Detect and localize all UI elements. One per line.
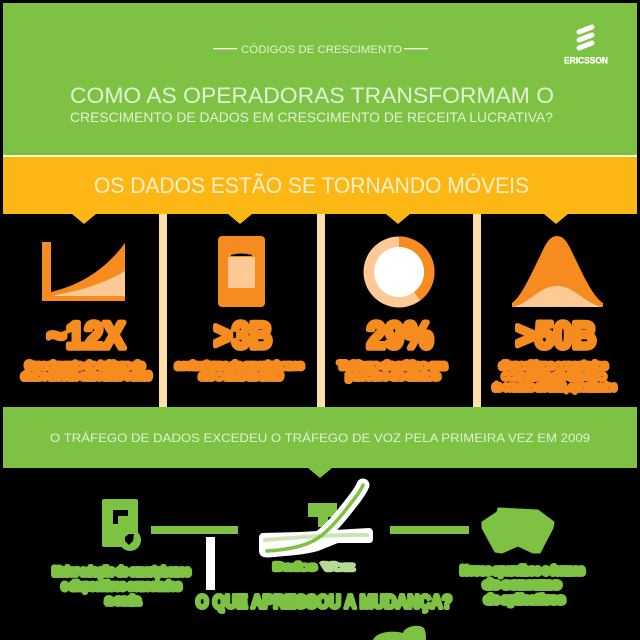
icon: bell curve	[512, 236, 603, 307]
banner heading: OS DADOS ESTÃO SE TORNANDO MÓVEIS	[94, 173, 529, 198]
stat number: ~12X	[47, 315, 125, 356]
stat description: com mais de um tipo	[503, 371, 605, 382]
panel: stat 3B	[176, 236, 303, 382]
icon: partial bottom icon	[373, 626, 426, 640]
chart: data vs voice crossing lines	[259, 485, 373, 573]
description right: Novos aparelhos e formas	[461, 565, 584, 577]
stat description: assinaturas de smartphones	[176, 360, 303, 372]
stat description	[493, 360, 616, 393]
stat number: 29%	[367, 315, 433, 356]
icon: fan of cards	[482, 508, 554, 553]
icon: Ericsson logo: ERICSSON	[564, 56, 608, 66]
description left	[53, 566, 190, 607]
white vertical connector	[206, 537, 215, 590]
chart labels: Dados	[274, 562, 317, 573]
connector line right	[390, 526, 469, 534]
description right: de consumo	[484, 579, 560, 591]
description left: Maior adoção de smartphones	[53, 566, 190, 578]
chart: green T mark	[308, 503, 337, 527]
icon: phone with data	[102, 499, 141, 551]
description left: a cada	[106, 595, 141, 607]
stat description: pacotes de dados	[347, 371, 439, 382]
stat description: dispositivos conectados	[500, 360, 607, 372]
title	[70, 83, 554, 125]
stat description: dados móveis entre 2013 e 2019	[22, 371, 151, 382]
stat description	[22, 360, 151, 382]
chart labels	[274, 562, 353, 573]
icon: Ericsson logo	[564, 27, 608, 66]
title: COMO AS OPERADORAS TRANSFORMAM O	[70, 83, 554, 108]
stat number: >3B	[214, 315, 272, 356]
stat description: Crescimento do tráfego de	[26, 360, 144, 372]
panel: yellow banner	[3, 157, 637, 224]
title: CRESCIMENTO DE DADOS EM CRESCIMENTO DE RECEITA LUCRATIVA?	[70, 109, 553, 125]
separators	[159, 214, 481, 408]
stat description	[176, 360, 303, 382]
icon: donut chart	[364, 236, 434, 308]
panel: green header	[3, 3, 637, 157]
band text: O TRÁFEGO DE DADOS EXCEDEU O TRÁFEGO DE VOZ PELA PRIMEIRA VEZ EM 2009	[50, 430, 590, 445]
icon: smartphone	[218, 236, 265, 307]
panel: green band	[3, 407, 637, 478]
panel: stat 12X	[22, 242, 151, 382]
stat number: >50B	[516, 315, 596, 356]
stat description: Tráfego de vídeo em	[339, 360, 446, 372]
description right: de aplicativos	[485, 594, 564, 606]
description left: e dispositivos conectados	[62, 580, 181, 592]
connector line left	[151, 526, 238, 534]
kicker heading: CÓDIGOS DE CRESCIMENTO	[241, 43, 402, 56]
stat description: até o final de 2019	[200, 371, 282, 382]
icon: growth chart	[42, 242, 125, 301]
stat description	[339, 360, 446, 382]
section heading: O QUE APRESSOU A MUDANÇA?	[196, 592, 452, 612]
panel: stat 50B	[493, 236, 616, 393]
description right	[461, 565, 584, 606]
chart labels: Voz	[323, 562, 353, 573]
panel: stat 29%	[339, 236, 446, 382]
